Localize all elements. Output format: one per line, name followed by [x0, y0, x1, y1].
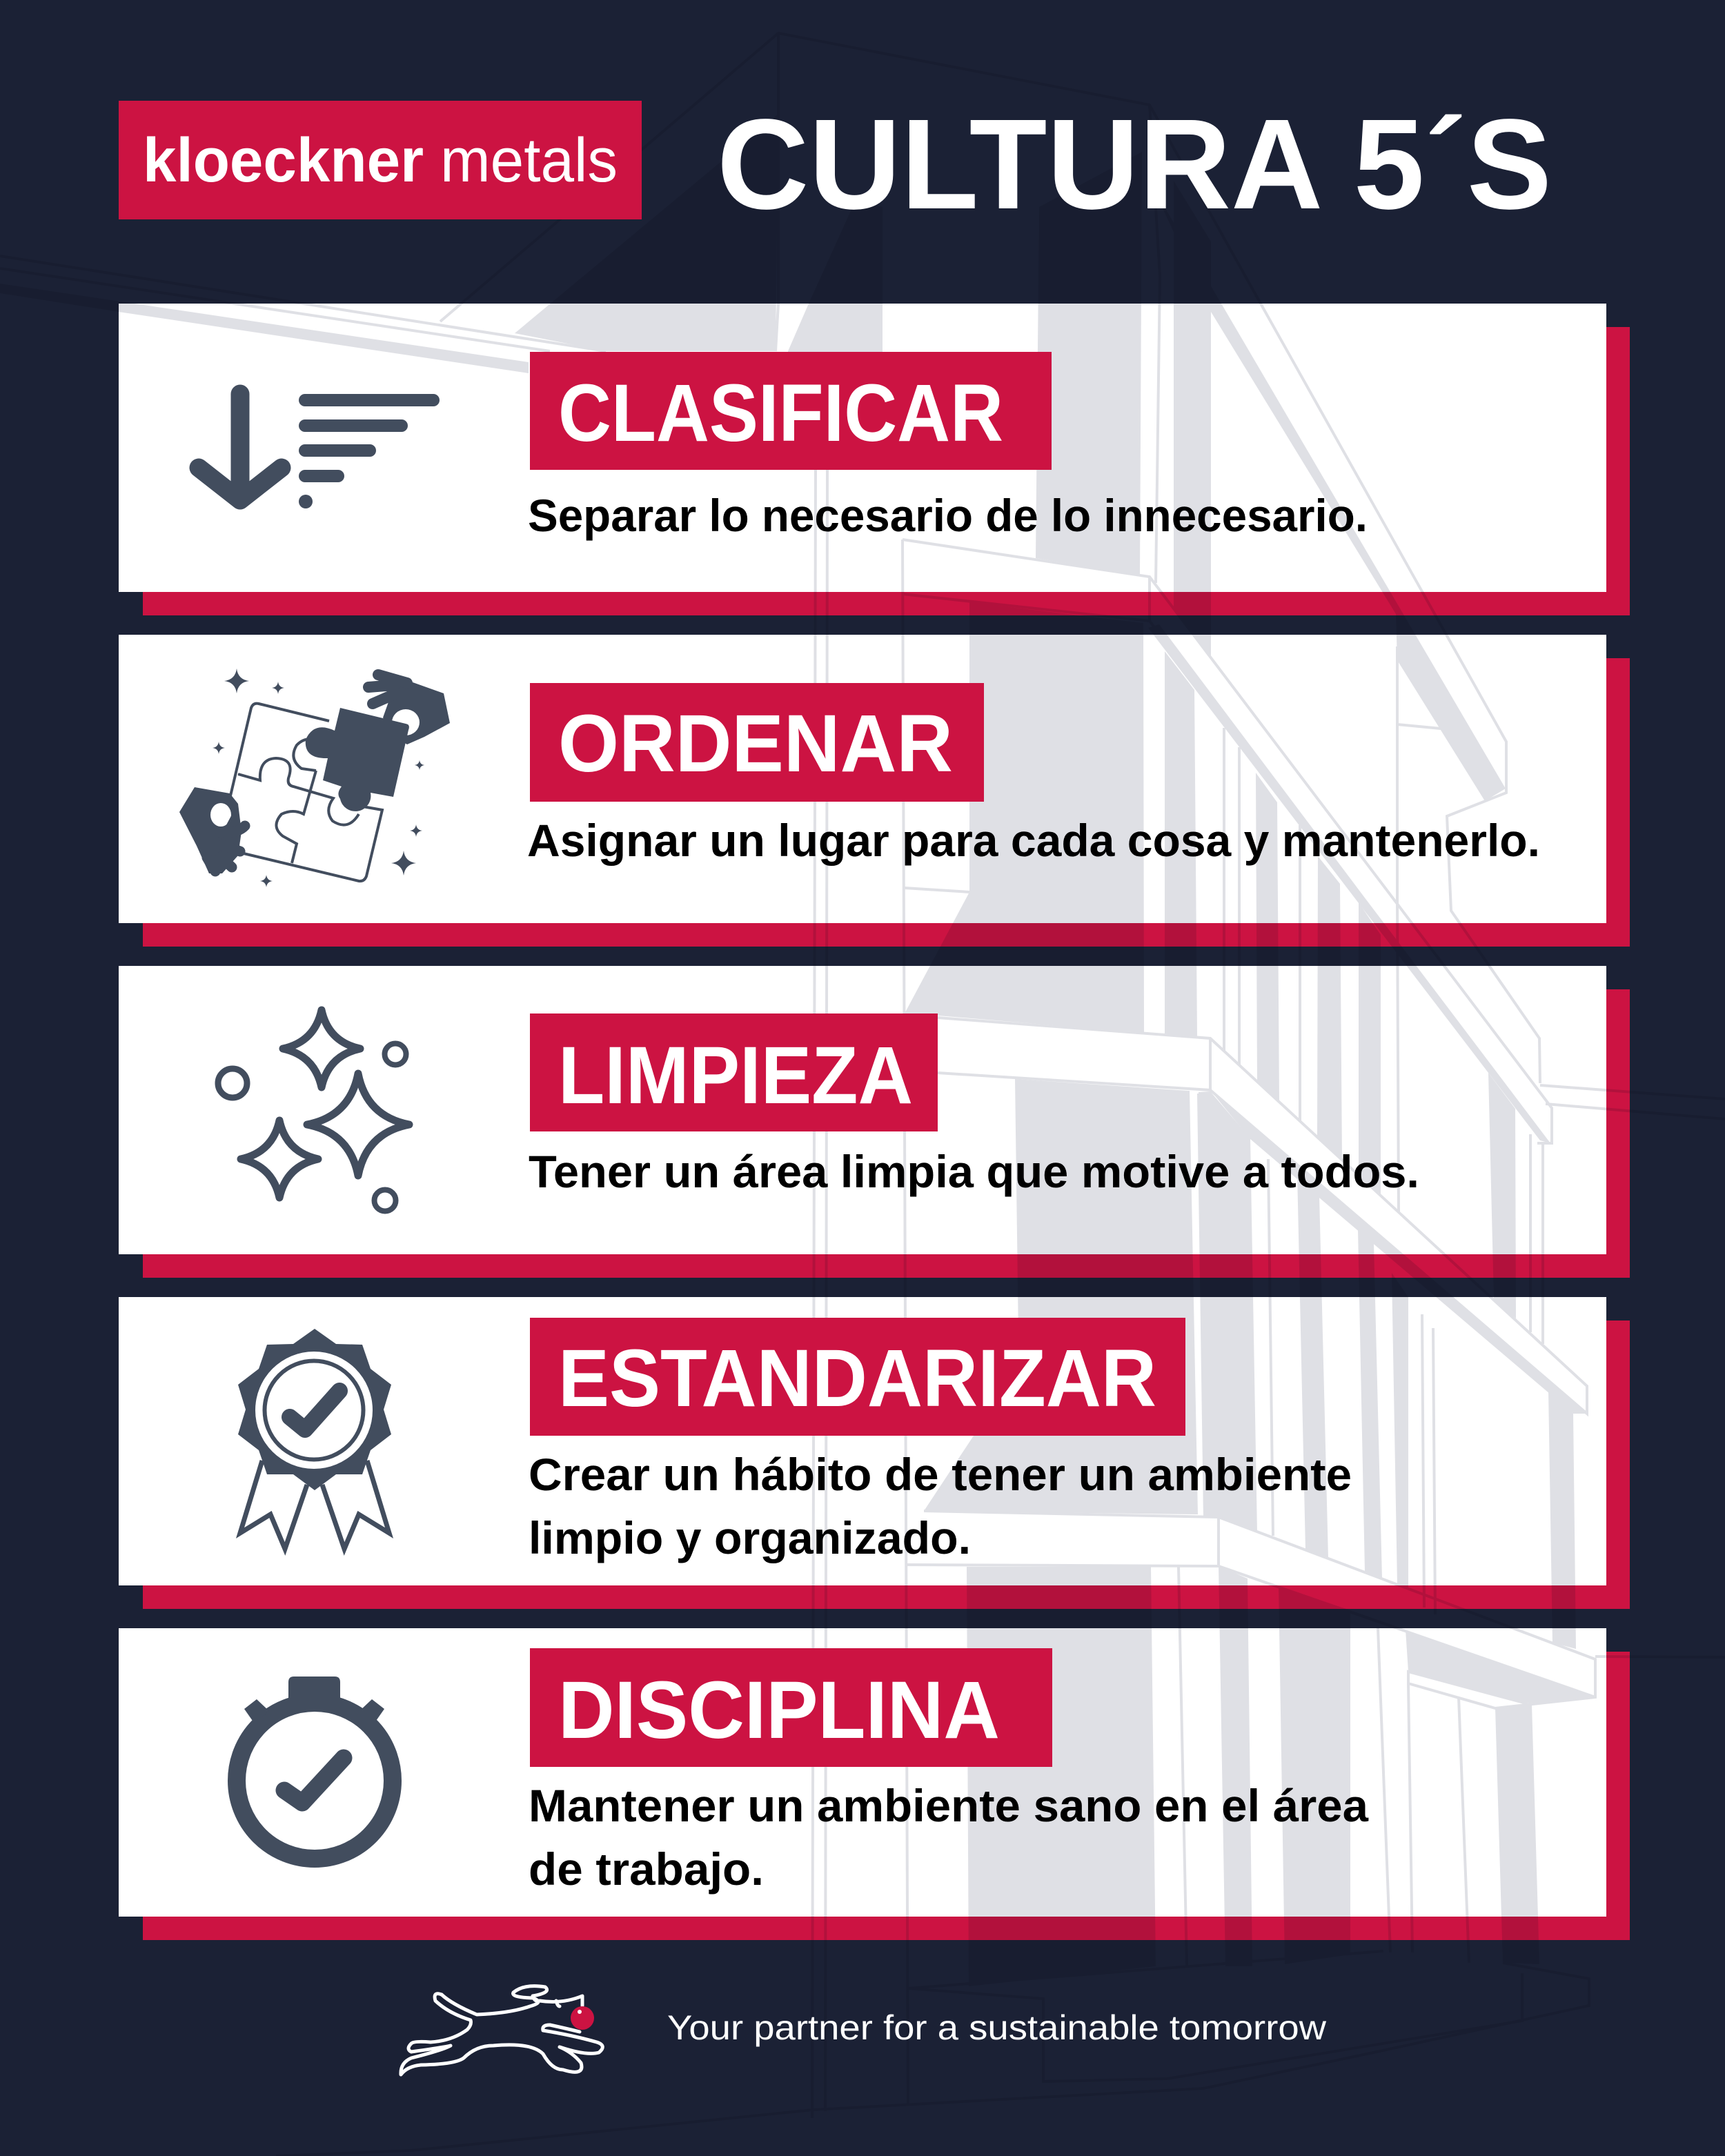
panel: clasificar	[119, 304, 1606, 592]
title: CULTURA 5´S	[717, 93, 1552, 236]
logo: kloeckner metals: metals	[440, 126, 618, 195]
heading: limpieza: LIMPIEZA	[558, 1030, 913, 1121]
heading: disciplina	[530, 1648, 1052, 1767]
heading: clasificar: CLASIFICAR	[558, 368, 1003, 459]
description: estandarizar: Crear un hábito de tener un ambiente	[529, 1449, 1352, 1500]
panel: limpieza	[119, 966, 1606, 1254]
icon: quality badge	[238, 1329, 391, 1549]
description: limpieza: Tener un área limpia que motive a todos.	[529, 1146, 1419, 1197]
description: disciplina: Mantener un ambiente sano en el área	[529, 1780, 1369, 1831]
description: ordenar: Asignar un lugar para cada cosa y mantenerlo.	[527, 815, 1540, 866]
icon: sort arrow	[199, 394, 433, 508]
description: disciplina	[529, 1780, 1369, 1895]
description: clasificar: Separar lo necesario de lo innecesario.	[528, 490, 1368, 541]
heading: ordenar: ORDENAR	[558, 698, 953, 789]
heading: estandarizar: ESTANDARIZAR	[558, 1333, 1156, 1424]
icon: sparkles	[218, 1010, 409, 1211]
logo: kloeckner metals: kloeckner	[143, 126, 424, 195]
logo: kloeckner metals	[119, 101, 642, 219]
icon: running dog logo	[401, 1986, 602, 2075]
panel: disciplina	[119, 1628, 1606, 1917]
icon: stopwatch with check	[237, 1677, 393, 1859]
panel: ordenar	[119, 635, 1606, 923]
heading: disciplina: DISCIPLINA	[558, 1665, 1000, 1756]
panel: estandarizar	[119, 1297, 1606, 1585]
heading: ordenar	[530, 683, 984, 802]
description: disciplina: de trabajo.	[529, 1843, 764, 1895]
tagline: Your partner for a sustainable tomorrow	[667, 2008, 1327, 2047]
icon: puzzle with hands	[179, 669, 450, 887]
description: estandarizar: limpio y organizado.	[529, 1512, 971, 1563]
description: estandarizar	[529, 1449, 1352, 1563]
panel backgrounds: red offset shadows and white cards	[119, 304, 1630, 1940]
